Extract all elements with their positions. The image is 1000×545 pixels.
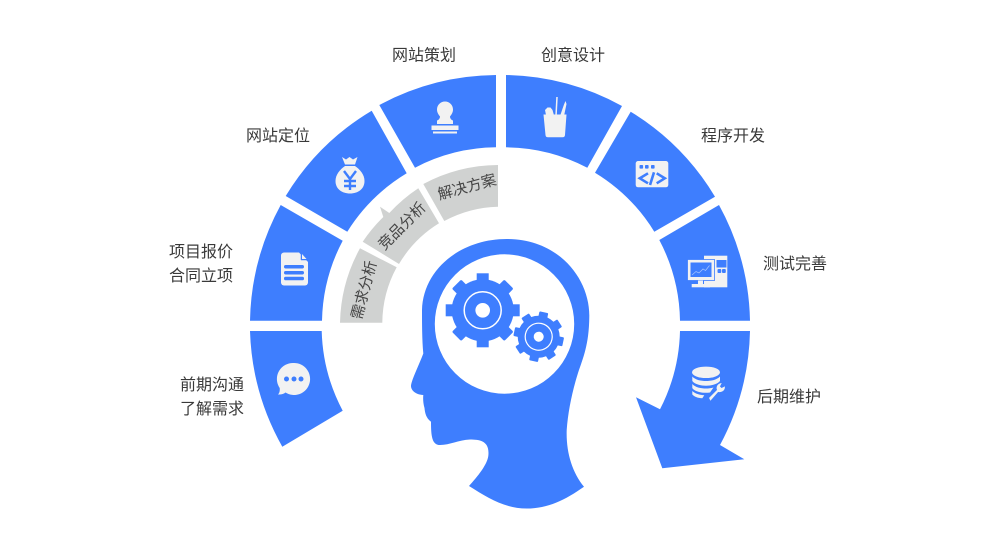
head silhouette with gears	[411, 239, 589, 508]
label: 程序开发: 程序开发	[701, 127, 765, 145]
segment: 项目报价	[250, 205, 343, 321]
label: 测试完善: 测试完善	[763, 255, 827, 273]
icon: code window	[636, 161, 668, 187]
label: 创意设计: 创意设计	[541, 46, 605, 64]
segment: 网站定位	[286, 111, 407, 232]
icon: pen cup	[544, 97, 566, 137]
icon: large gear	[446, 273, 520, 347]
label: 竞品分析: 竞品分析	[374, 198, 430, 254]
segment: 程序开发	[595, 112, 715, 232]
segment: 测试完善	[659, 205, 750, 321]
label: 网站定位: 网站定位	[246, 127, 310, 145]
label: 前期沟通 了解需求: 前期沟通	[180, 376, 244, 394]
icon: document	[281, 252, 308, 286]
icon: money bag	[336, 157, 364, 194]
label: 解决方案: 解决方案	[436, 171, 498, 203]
segment: 创意设计	[506, 75, 622, 168]
label: 后期维护: 后期维护	[757, 388, 821, 406]
label: 项目报价 合同立项: 项目报价	[169, 243, 233, 261]
arc: 竞品分析	[363, 188, 439, 264]
arc: 需求分析	[340, 248, 397, 323]
icon: database with wrench	[692, 367, 724, 400]
segment: 后期维护 arrow	[636, 331, 750, 468]
icon: chat bubble	[277, 363, 310, 395]
icon: stamp	[432, 102, 458, 134]
label: 前期沟通 了解需求: 了解需求	[180, 400, 244, 418]
icon: small gear	[509, 307, 568, 366]
label: 项目报价 合同立项	[169, 243, 233, 285]
label: 项目报价 合同立项: 合同立项	[169, 267, 233, 285]
icon: computer	[688, 256, 727, 287]
segment: 网站策划	[379, 75, 496, 168]
arc: 解决方案	[423, 165, 498, 221]
label: 网站策划: 网站策划	[392, 46, 456, 64]
label: 需求分析: 需求分析	[349, 259, 380, 321]
segment: 前期沟通	[250, 331, 343, 447]
label: 前期沟通 了解需求	[180, 376, 244, 418]
